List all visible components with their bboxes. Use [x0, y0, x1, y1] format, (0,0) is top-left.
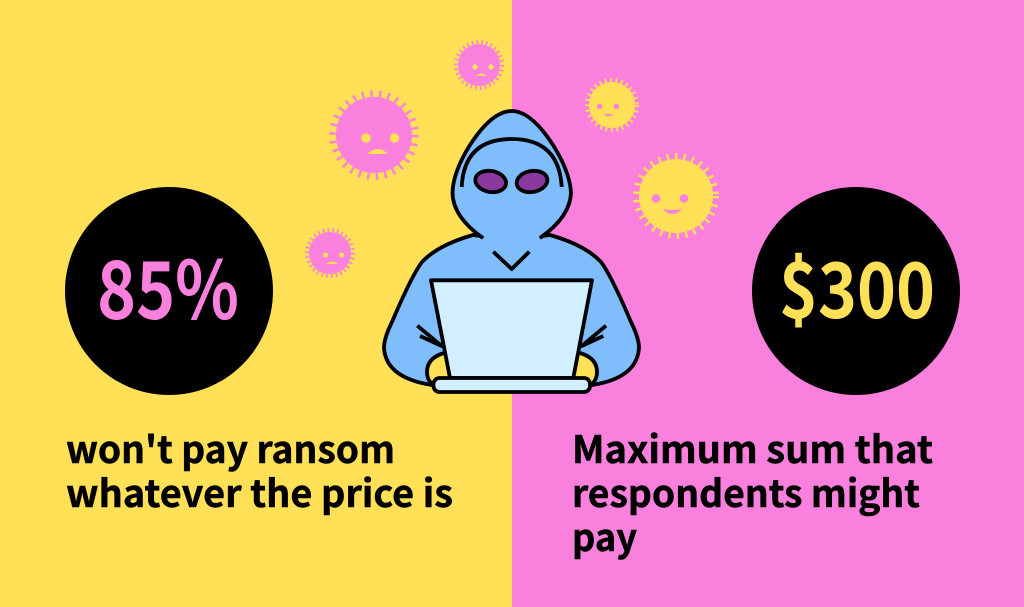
- hood inner arc: [462, 139, 562, 187]
- stat badge: 85%: [65, 187, 273, 395]
- text block: right caption: respondents might: [572, 463, 920, 518]
- collar: [493, 252, 529, 269]
- hood: [452, 111, 571, 245]
- icon: small sad pink virus top: [456, 42, 502, 88]
- hacker body and arms: [384, 235, 639, 385]
- text block: left caption: whatever the price is: [66, 463, 453, 518]
- text block: left caption: won't pay ransom: [66, 419, 395, 474]
- right hand: [569, 353, 597, 385]
- text block: right caption: pay: [572, 507, 637, 562]
- right eye: [515, 168, 549, 195]
- right fingers: [582, 326, 606, 346]
- icon: small happy yellow virus: [588, 80, 636, 130]
- icon: small sad pink virus bottom: [308, 230, 352, 276]
- text block: right caption: [572, 419, 933, 562]
- icon: hooded hacker at laptop: [384, 111, 639, 392]
- panel: pink right background: [512, 0, 1024, 607]
- laptop base: [434, 378, 590, 392]
- icon: large sad pink virus: [333, 94, 415, 176]
- left hand: [427, 353, 455, 385]
- panel: yellow left background: [0, 0, 512, 607]
- stat badge: $300: [752, 187, 960, 395]
- laptop screen: [431, 280, 592, 378]
- left fingers: [417, 326, 442, 346]
- text block: right caption: Maximum sum that: [572, 419, 933, 474]
- stat badge: 85%: 85%: [97, 227, 239, 343]
- icon: large happy yellow virus: [636, 156, 716, 236]
- left eye: [474, 168, 508, 195]
- stat badge: $300: $300: [779, 230, 935, 341]
- text block: left caption: [66, 419, 453, 518]
